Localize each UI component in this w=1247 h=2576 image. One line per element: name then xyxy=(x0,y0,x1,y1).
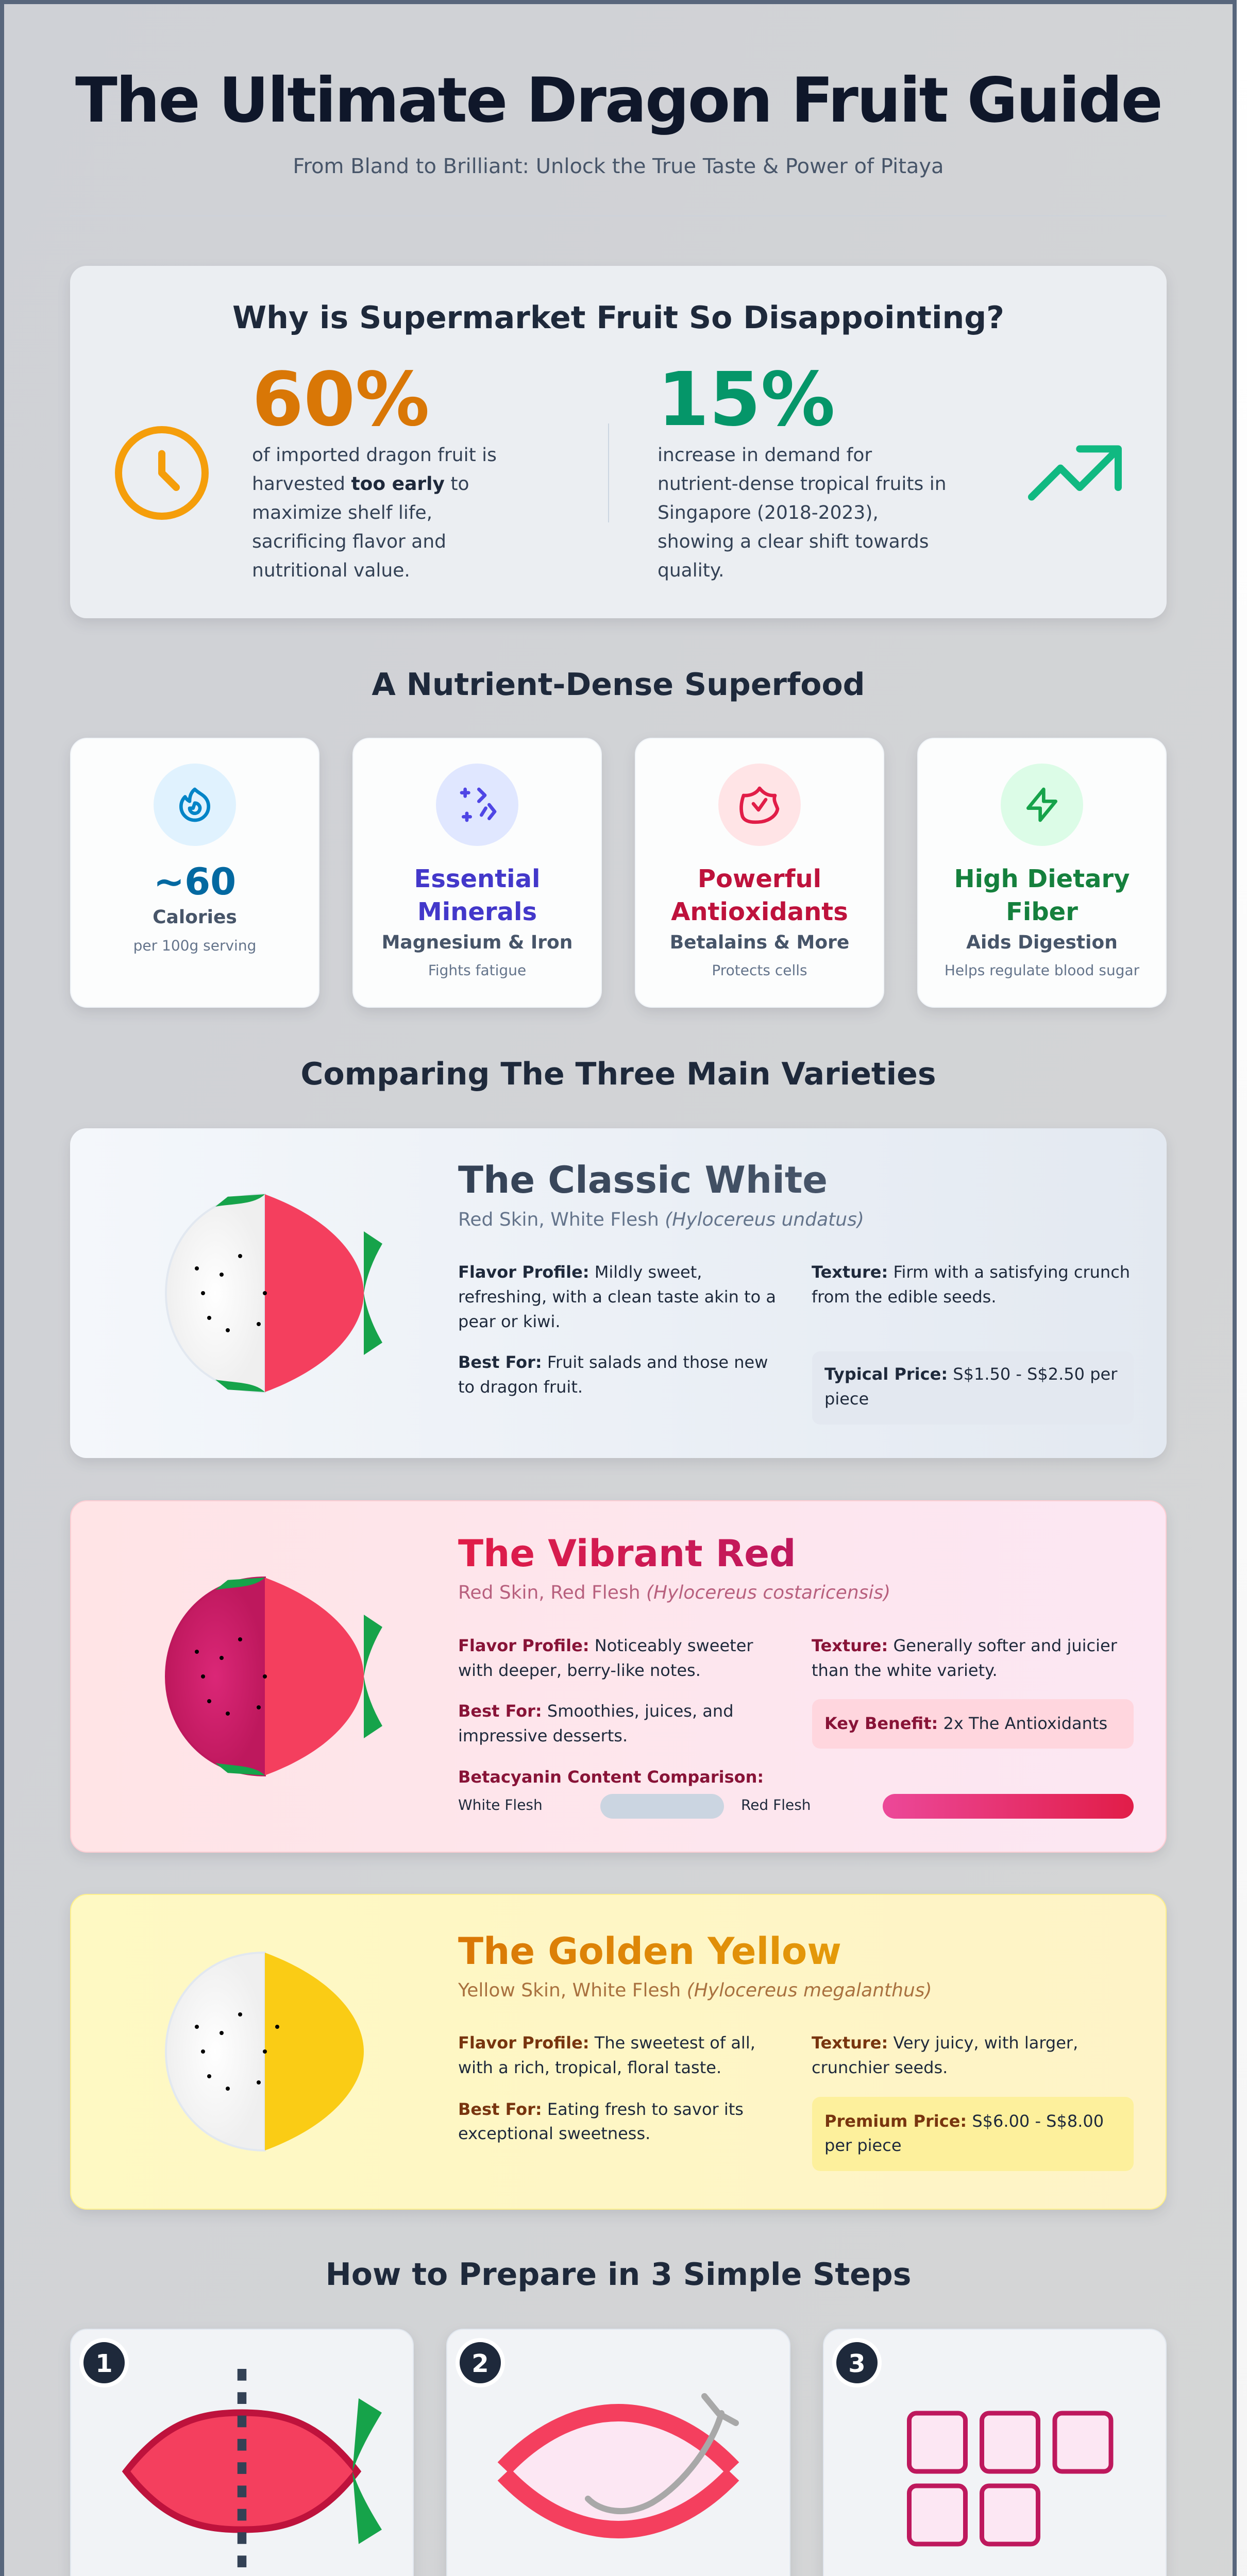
panel: powerful antioxidants: Protects cells xyxy=(712,962,807,979)
stat: 60 percent: harvested too early to xyxy=(252,473,469,495)
heading: how to prepare: How to Prepare in 3 Simple Steps xyxy=(326,2257,911,2293)
bar chart: betacyanin comparison: White Flesh xyxy=(458,1797,543,1814)
stat: 60 percent: 60% xyxy=(252,356,430,443)
flavor profile: with a rich, tropical, floral taste. xyxy=(458,2058,721,2077)
heading: nutrient-dense superfood: A Nutrient-Dense Superfood xyxy=(372,667,865,703)
texture: Texture: Very juicy, with larger, xyxy=(812,2033,1078,2053)
panel: the classic white xyxy=(70,1128,1167,1458)
flavor profile: with deeper, berry-like notes. xyxy=(458,1660,701,1680)
flavor profile xyxy=(458,1262,776,1331)
variety heading: The Golden Yellow xyxy=(458,1929,841,1973)
panel heading: Why is Supermarket Fruit So Disappointing? xyxy=(232,300,1004,336)
best for: impressive desserts. xyxy=(458,1726,628,1745)
stat: 15 percent: 15% xyxy=(658,356,835,443)
step number 1: 1 xyxy=(95,2349,113,2378)
icon: clock xyxy=(119,430,205,516)
stat: 60 percent: maximize shelf life, xyxy=(252,502,432,523)
stat: 60 percent: of imported dragon fruit is xyxy=(252,445,497,466)
subtitle: From Bland to Brilliant: Unlock the True Taste & Power of Pitaya xyxy=(293,155,944,178)
icon: trending up xyxy=(1032,449,1118,497)
panel: essential minerals: Fights fatigue xyxy=(428,962,526,979)
heading: comparing varieties: Comparing The Three Main Varieties xyxy=(300,1056,936,1092)
best for: exceptional sweetness. xyxy=(458,2124,650,2143)
texture xyxy=(812,2033,1078,2077)
premium price callout: Premium Price: S$6.00 - S$8.00 xyxy=(824,2111,1104,2131)
illustration: scooping flesh xyxy=(504,2396,736,2530)
step number 3 xyxy=(834,2340,880,2385)
stat: 60 percent xyxy=(252,356,497,581)
illustration: cubes xyxy=(909,2413,1111,2544)
illustration: red-flesh fruit xyxy=(166,1578,382,1775)
panel: step 1 slice in half xyxy=(71,2329,413,2576)
panel: powerful antioxidants xyxy=(635,738,884,1007)
key benefit callout: Key Benefit: 2x The Antioxidants xyxy=(824,1714,1107,1733)
texture: Texture: Generally softer and juicier xyxy=(812,1636,1118,1655)
stat: 15 percent: showing a clear shift towards xyxy=(658,531,929,552)
bar chart: betacyanin comparison: Betacyanin Content Comparison: xyxy=(458,1767,764,1787)
flavor profile xyxy=(458,1636,753,1680)
best for xyxy=(458,2099,744,2143)
stat: 60 percent: nutritional value. xyxy=(252,560,410,581)
panel: essential minerals: Magnesium & Iron xyxy=(382,932,572,953)
texture xyxy=(812,1636,1118,1680)
premium price callout xyxy=(812,2097,1134,2171)
texture xyxy=(812,1262,1130,1307)
step number 3: 3 xyxy=(848,2349,866,2378)
panel: the golden yellow xyxy=(71,1894,1166,2209)
illustration: white-flesh fruit xyxy=(166,1194,382,1392)
flavor profile: refreshing, with a clean taste akin to a xyxy=(458,1287,776,1307)
flavor profile: pear or kiwi. xyxy=(458,1312,561,1331)
panel: step 3 cube and enjoy xyxy=(823,2329,1166,2576)
best for: Best For: Fruit salads and those new xyxy=(458,1352,768,1372)
texture: from the edible seeds. xyxy=(812,1287,996,1307)
best for: Best For: Eating fresh to savor its xyxy=(458,2099,744,2119)
best for: Best For: Smoothies, juices, and xyxy=(458,1701,734,1721)
panel: essential minerals xyxy=(353,738,601,1007)
typical price callout: piece xyxy=(824,1389,869,1409)
panel: calories: per 100g serving xyxy=(133,937,256,954)
panel: why is supermarket fruit so disappointing xyxy=(70,266,1167,618)
variety subtitle: Yellow Skin, White Flesh (Hylocereus megalanthus) xyxy=(458,1980,932,2001)
key benefit callout xyxy=(812,1699,1134,1749)
panel: high dietary fiber: Helps regulate blood sugar xyxy=(945,962,1140,979)
flavor profile: Flavor Profile: Mildly sweet, xyxy=(458,1262,702,1282)
texture: crunchier seeds. xyxy=(812,2058,948,2077)
icon: shield check xyxy=(742,788,778,822)
panel: high dietary fiber: Fiber xyxy=(1006,897,1078,926)
texture: Texture: Firm with a satisfying crunch xyxy=(812,1262,1130,1282)
panel: calories: Calories xyxy=(153,907,237,928)
panel: step 2 scoop or peel xyxy=(447,2329,790,2576)
stat: 15 percent: nutrient-dense tropical fruits in xyxy=(658,473,947,495)
panel: essential minerals: Minerals xyxy=(417,897,537,926)
bar chart: betacyanin comparison: Red Flesh xyxy=(741,1797,811,1814)
texture: than the white variety. xyxy=(812,1660,998,1680)
panel: powerful antioxidants: Betalains & More xyxy=(670,932,849,953)
variety heading: The Classic White xyxy=(458,1158,828,1201)
panel: powerful antioxidants: Antioxidants xyxy=(671,897,848,926)
icon: minerals xyxy=(462,789,495,820)
illustration: slicing the fruit xyxy=(126,2369,382,2568)
premium price callout: per piece xyxy=(824,2136,902,2155)
variety subtitle: Red Skin, Red Flesh (Hylocereus costaricensis) xyxy=(458,1582,890,1603)
panel: the vibrant red xyxy=(71,1501,1166,1852)
flavor profile: Flavor Profile: Noticeably sweeter xyxy=(458,1636,753,1655)
best for: to dragon fruit. xyxy=(458,1377,583,1397)
stat: 15 percent: increase in demand for xyxy=(658,445,872,466)
stat: 15 percent: quality. xyxy=(658,560,724,581)
step number 1 xyxy=(81,2340,127,2385)
panel: high dietary fiber: High Dietary xyxy=(954,865,1130,893)
stat: 60 percent: sacrificing flavor and xyxy=(252,531,446,552)
variety subtitle: Red Skin, White Flesh (Hylocereus undatus) xyxy=(458,1209,864,1230)
bar chart: betacyanin comparison xyxy=(458,1767,1134,1819)
step number 2: 2 xyxy=(471,2349,489,2378)
panel: powerful antioxidants: Powerful xyxy=(698,865,821,893)
panel: essential minerals: Essential xyxy=(414,865,540,893)
stat: 15 percent: Singapore (2018-2023), xyxy=(658,502,879,523)
variety heading: The Vibrant Red xyxy=(458,1532,796,1575)
header xyxy=(75,65,1161,178)
panel: calories xyxy=(71,738,319,1007)
stat: 15 percent xyxy=(658,356,947,581)
typical price callout xyxy=(812,1351,1134,1425)
icon: flame xyxy=(181,789,209,820)
best for xyxy=(458,1701,734,1745)
panel: high dietary fiber: Aids Digestion xyxy=(966,932,1118,953)
panel: high dietary fiber xyxy=(918,738,1166,1007)
illustration: yellow fruit xyxy=(166,1953,364,2150)
flavor profile: Flavor Profile: The sweetest of all, xyxy=(458,2033,755,2053)
step number 2 xyxy=(458,2340,503,2385)
flavor profile xyxy=(458,2033,755,2077)
panel: calories: ~60 xyxy=(154,860,236,903)
icon: lightning bolt xyxy=(1028,789,1056,820)
best for xyxy=(458,1352,768,1397)
title: The Ultimate Dragon Fruit Guide xyxy=(75,65,1161,137)
typical price callout: Typical Price: S$1.50 - S$2.50 per xyxy=(824,1364,1118,1384)
